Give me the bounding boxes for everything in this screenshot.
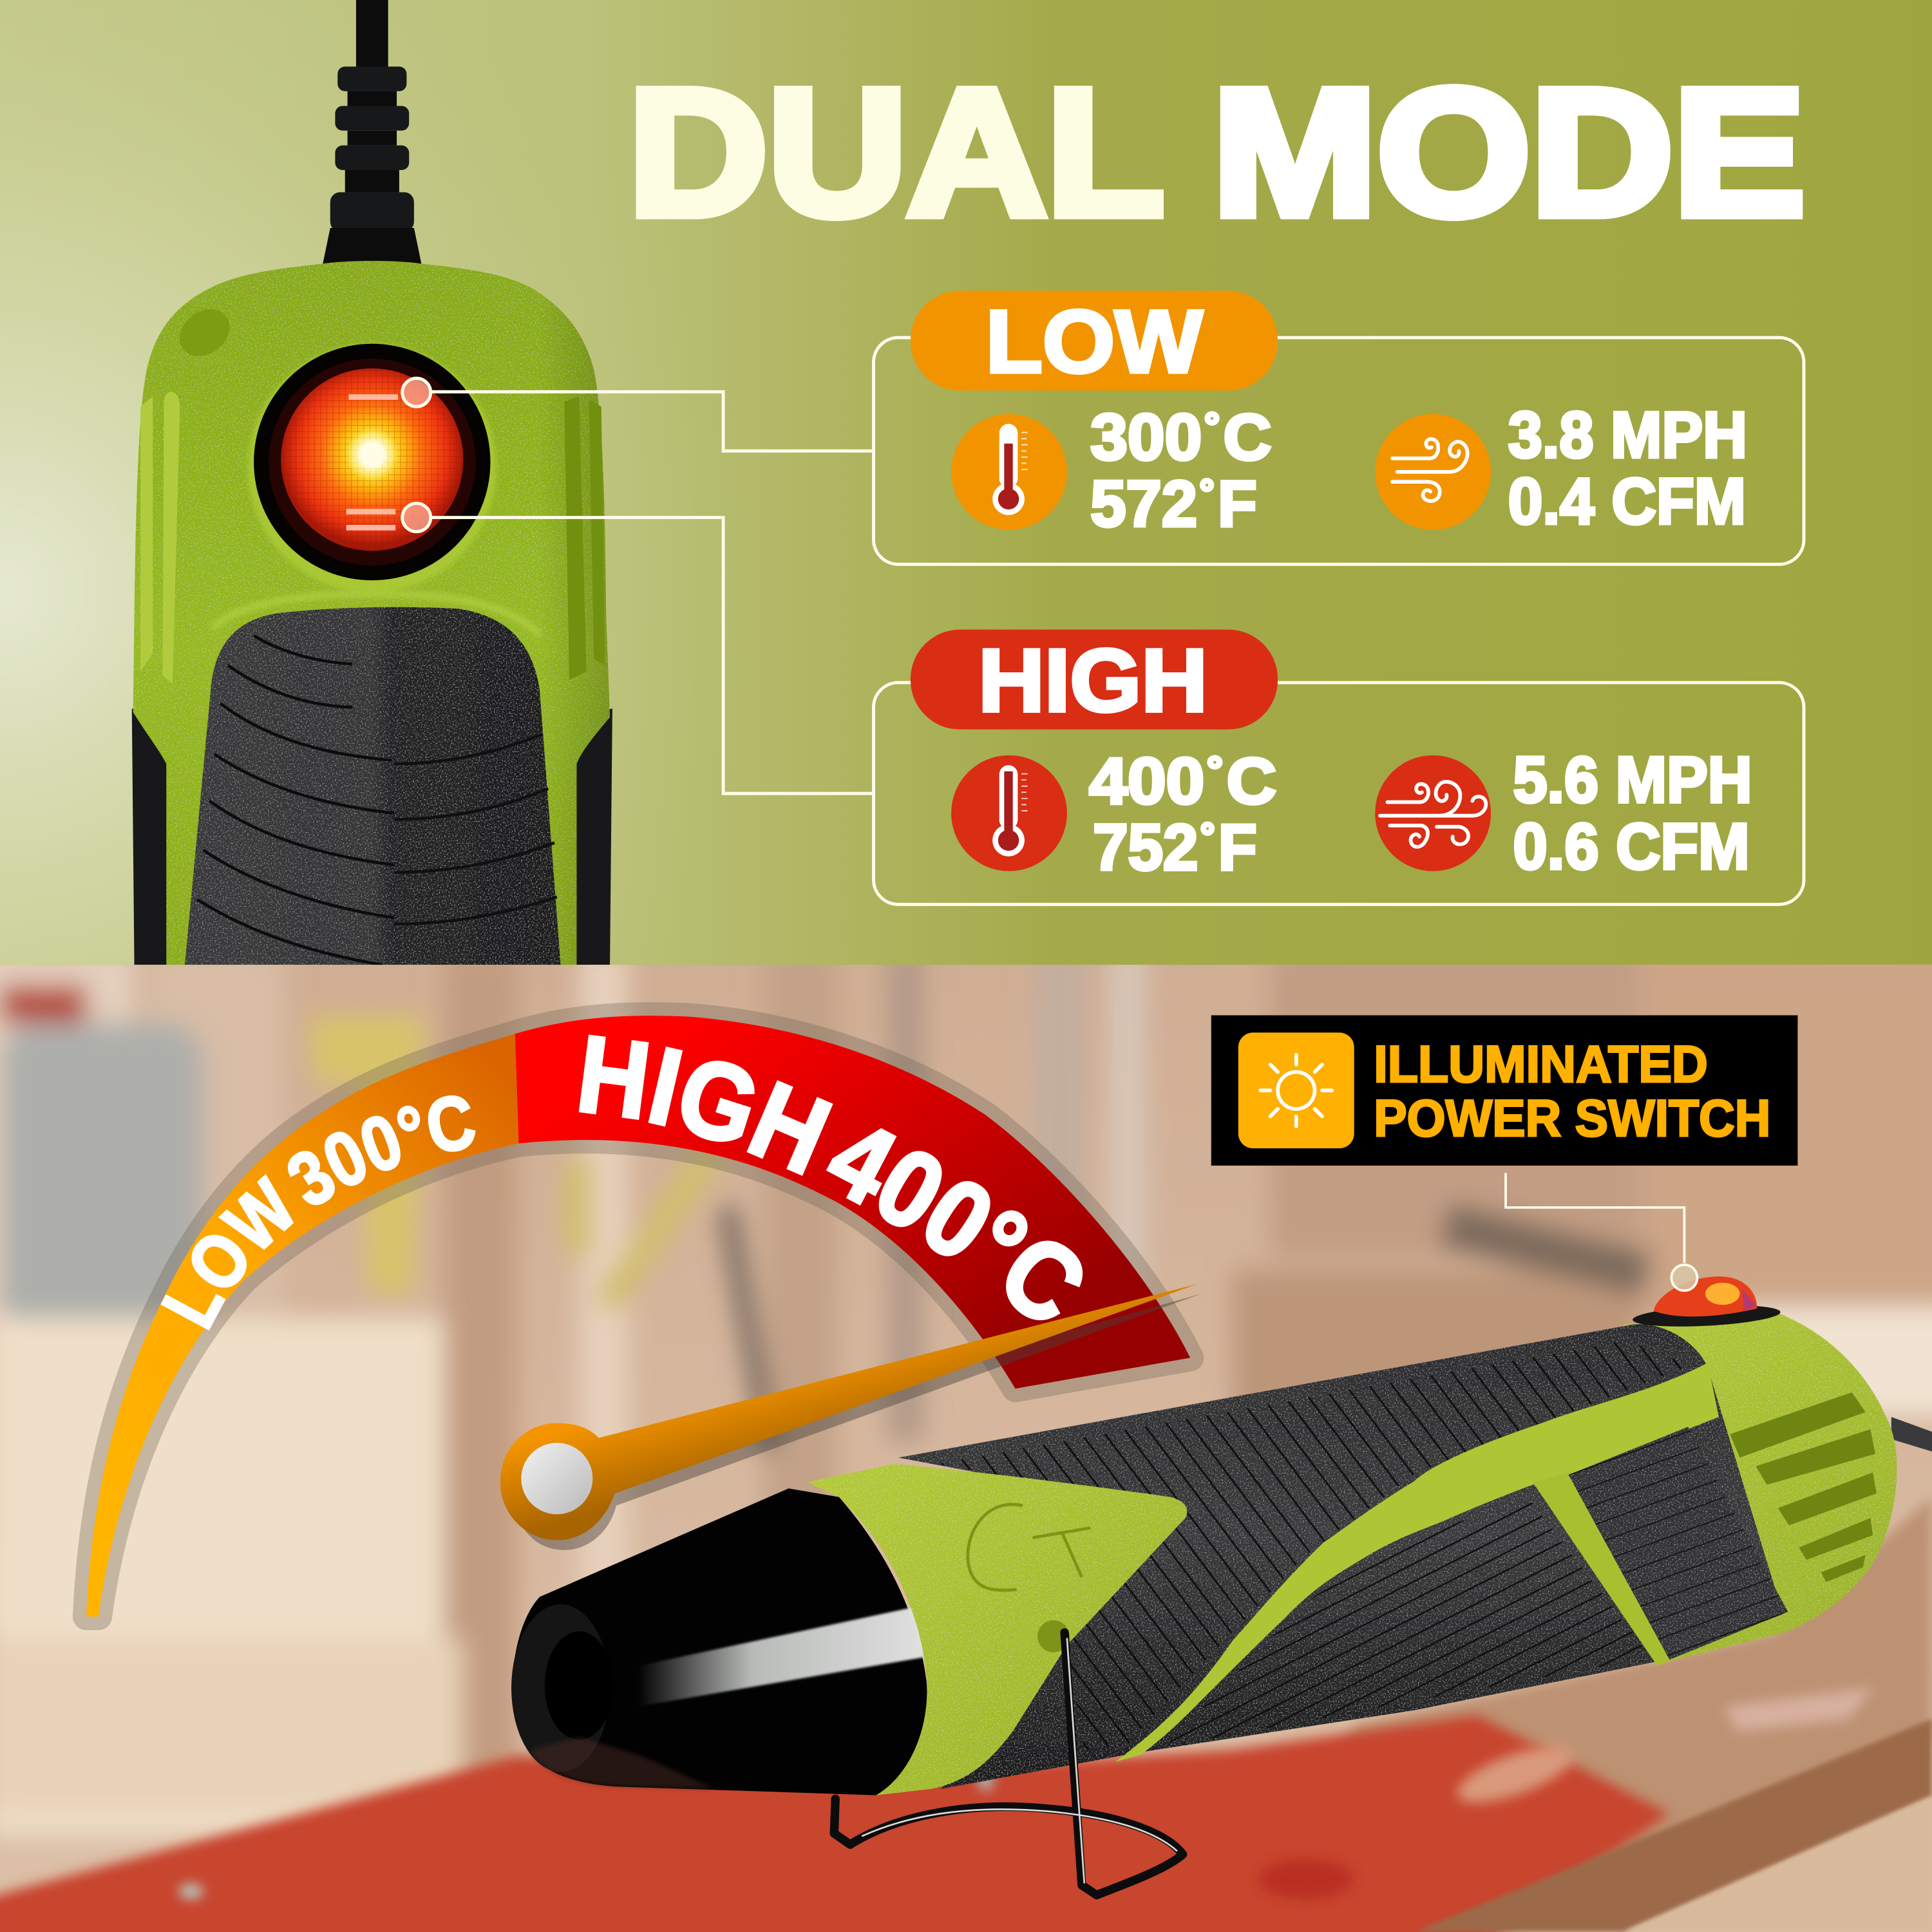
low temperature text: °: [1204, 406, 1220, 447]
workbench red top: [0, 1715, 1669, 1932]
high wind icon: [1375, 755, 1491, 871]
high badge: [911, 630, 1278, 730]
needle: [500, 1284, 1198, 1540]
callout text: ILLUMINATED: [1374, 1036, 1708, 1094]
low temperature text: °: [1200, 472, 1214, 513]
switch housing: [254, 344, 490, 580]
high frame: [874, 683, 1804, 904]
main grip: [898, 1324, 1783, 1789]
green body: [133, 261, 610, 965]
low temperature text: [1090, 401, 1271, 540]
low badge: LOW: [986, 292, 1202, 392]
callout: illuminated power switch: [1211, 1016, 1797, 1166]
low badge: [911, 291, 1278, 392]
body dimple: [170, 299, 239, 366]
upper grip ribs: [936, 1341, 1690, 1750]
title: DUAL: [629, 52, 1164, 253]
callout box: [1211, 1016, 1797, 1166]
low thermometer icon: [951, 414, 1067, 530]
logo CT: [968, 1504, 1090, 1590]
low temperature text: C: [1224, 401, 1271, 474]
nozzle mouth: [511, 1604, 614, 1772]
rear green cap: [1540, 1314, 1897, 1661]
high airflow text: 0.6 CFM: [1513, 810, 1750, 883]
switch marks: [346, 394, 398, 531]
panel: top background: [0, 0, 1932, 965]
power cord: [1891, 1417, 1932, 1452]
grip ribs: [197, 636, 557, 965]
high temperature text: 752: [1093, 811, 1202, 884]
needle shadow: [515, 1294, 1201, 1550]
green collar: [807, 1464, 1187, 1795]
high temperature text: °: [1200, 816, 1215, 857]
workbench paint patches: [178, 1688, 1873, 1899]
title: MODE: [1213, 52, 1805, 253]
low arc segment: [86, 1034, 518, 1616]
rear grip panel: [1569, 1427, 1788, 1660]
photo: heat gun rear view with switch: [132, 0, 612, 965]
low frame: [874, 337, 1804, 564]
right vent strips: [564, 397, 605, 680]
lamp flare: [348, 431, 395, 478]
power cord with strain relief: [323, 0, 421, 263]
high label: HIGH 400°C: [578, 1034, 1083, 1320]
rear vents: [1730, 1392, 1877, 1582]
arc text baseline low: [207, 1140, 567, 1333]
stand mount: [1037, 1620, 1070, 1653]
low label: LOW 300°C: [160, 1095, 475, 1331]
heat gun: [511, 1265, 1932, 1895]
high temperature text: C: [1227, 744, 1276, 817]
high airflow text: 5.6 MPH: [1513, 744, 1752, 817]
switch callout dot: [1671, 1265, 1698, 1291]
needle hub cap: [521, 1443, 592, 1514]
low temperature text: 300: [1090, 401, 1199, 474]
arc text baseline high: [574, 1112, 1133, 1405]
body right shading: [370, 263, 610, 965]
high temperature text: °: [1207, 750, 1223, 791]
switch inner ring: [269, 359, 476, 565]
left recess strips: [140, 392, 180, 684]
switch recess: [248, 344, 497, 592]
nozzle highlight: [638, 1605, 924, 1707]
high arc segment: [515, 1016, 1190, 1388]
low airflow text: [1508, 399, 1747, 538]
high temperature text: [1089, 744, 1276, 884]
workbench lower plank: [1624, 1797, 1932, 1932]
panel: high mode: [874, 630, 1804, 904]
workbench plank edge: [1414, 1719, 1932, 1932]
high thermometer icon: [951, 755, 1067, 871]
rear panel ribs: [1569, 1427, 1788, 1660]
nozzle lower smoke tint: [530, 1738, 715, 1789]
connector dot high: [402, 504, 431, 532]
low temperature text: F: [1218, 468, 1257, 540]
body highlight above grip: [212, 594, 540, 634]
callout leader line: [1506, 1173, 1684, 1263]
gauge halo: [86, 1016, 1190, 1616]
green swoosh: [1115, 1363, 1719, 1762]
high temperature text: F: [1218, 811, 1257, 884]
workbench wood surface: [1232, 1497, 1932, 1932]
low temperature text: 572: [1090, 468, 1199, 540]
panel: low mode: [874, 291, 1804, 564]
high airflow text: [1513, 744, 1752, 883]
connector lines: [431, 392, 874, 793]
low airflow text: 0.4 CFM: [1508, 465, 1746, 538]
wire stand: [834, 1633, 1183, 1895]
nozzle: [513, 1488, 927, 1795]
callout text: [1374, 1036, 1770, 1148]
photo: blurred workshop background: [0, 949, 1932, 1932]
lamp grid texture: [281, 368, 463, 551]
low wind icon: [1375, 414, 1491, 530]
high temperature text: 400: [1089, 744, 1198, 817]
black side bands: [132, 708, 612, 965]
lower grip ribs: [1164, 1497, 1651, 1747]
grip: [185, 607, 561, 965]
gauge: [86, 1012, 1201, 1616]
icon: sun: [1238, 1032, 1354, 1148]
title: [629, 52, 1805, 253]
switch lamp: [281, 368, 463, 551]
high badge: HIGH: [978, 631, 1208, 730]
callout text: POWER SWITCH: [1374, 1090, 1770, 1148]
illuminated switch: [1632, 1276, 1781, 1330]
connector dot low: [402, 378, 431, 406]
low airflow text: 3.8 MPH: [1508, 399, 1747, 471]
green branch between panels: [1533, 1471, 1678, 1666]
